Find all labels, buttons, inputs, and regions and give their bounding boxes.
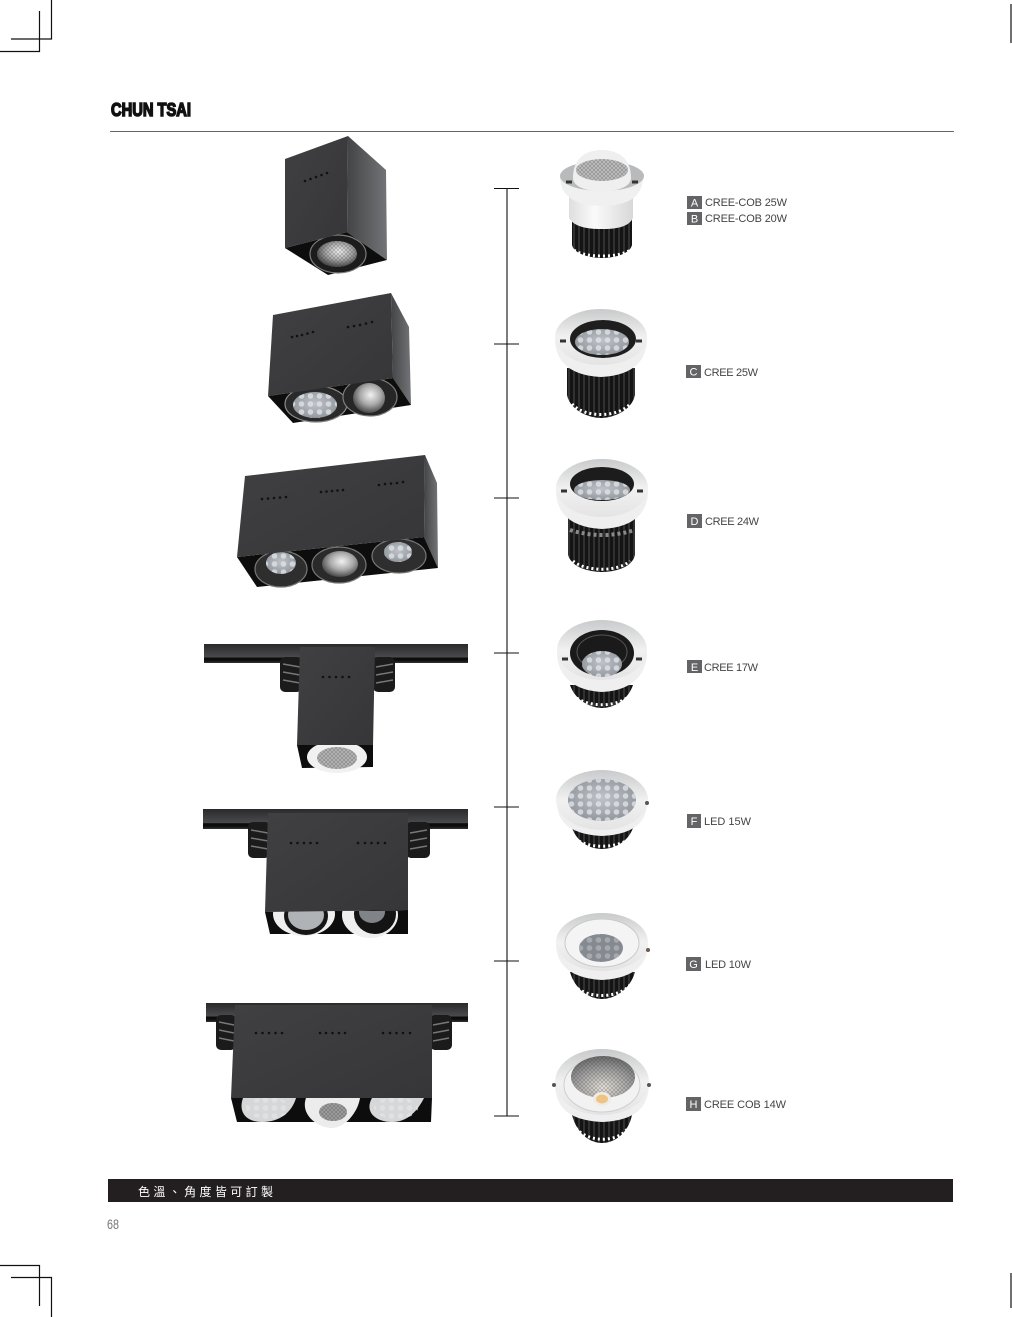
label: H CREE COB 14W: CREE COB 14W — [704, 1099, 787, 1111]
label: B CREE-COB 20W: B — [691, 214, 698, 226]
label: C CREE 25W — [686, 365, 759, 379]
label: B CREE-COB 20W: CREE-COB 20W — [705, 213, 788, 225]
panel: box fixtures — [237, 136, 438, 587]
label: G LED 10W: G — [689, 959, 698, 971]
crop mark: top left — [0, 0, 52, 52]
label: D CREE 24W — [687, 514, 760, 528]
lamp module E — [557, 620, 647, 708]
label: A CREE-COB 25W: CREE-COB 25W — [705, 197, 788, 209]
fixture: double track head — [203, 809, 468, 938]
lamp module F — [556, 770, 649, 849]
footer bar: 色溫、角度皆可訂製 — [138, 1184, 273, 1199]
label: C CREE 25W: C — [690, 366, 698, 378]
label: E CREE 17W — [687, 660, 759, 674]
label: E CREE 17W: E — [691, 662, 698, 674]
fixture: single ceiling box — [285, 136, 387, 275]
page number: 68 — [107, 1216, 119, 1232]
lamp module D — [556, 459, 648, 572]
brand logo: CHUN TSAI — [111, 100, 191, 120]
label: A CREE-COB 25W: A — [691, 198, 699, 210]
lamp module C — [555, 309, 647, 418]
label: G LED 10W — [686, 957, 752, 971]
label: G LED 10W: LED 10W — [705, 959, 752, 971]
fixture: double ceiling box — [268, 293, 411, 423]
fixture: single track head — [204, 644, 468, 773]
label: E CREE 17W: CREE 17W — [704, 662, 759, 674]
label: C CREE 25W: CREE 25W — [704, 367, 759, 379]
label: H CREE COB 14W — [686, 1097, 787, 1111]
crop mark: bottom left — [0, 1266, 52, 1317]
label: F LED 15W: F — [691, 816, 698, 828]
crop mark: bottom right — [1010, 1273, 1012, 1308]
label: D CREE 24W: D — [691, 516, 699, 528]
fixture: triple ceiling box — [237, 455, 438, 587]
lamp module H — [552, 1049, 651, 1143]
fixture: triple track head — [206, 1003, 468, 1128]
label: D CREE 24W: CREE 24W — [705, 516, 760, 528]
header rule — [110, 131, 954, 132]
panel: track fixtures — [203, 644, 468, 1128]
label: H CREE COB 14W: H — [690, 1099, 698, 1111]
connector bracket — [494, 188, 519, 1116]
label: F LED 15W: LED 15W — [704, 816, 752, 828]
label: F LED 15W — [687, 814, 752, 828]
lamp module A — [560, 150, 644, 258]
lamp module G — [556, 913, 650, 999]
crop mark: top right — [1010, 4, 1012, 43]
footer bar — [108, 1179, 953, 1202]
